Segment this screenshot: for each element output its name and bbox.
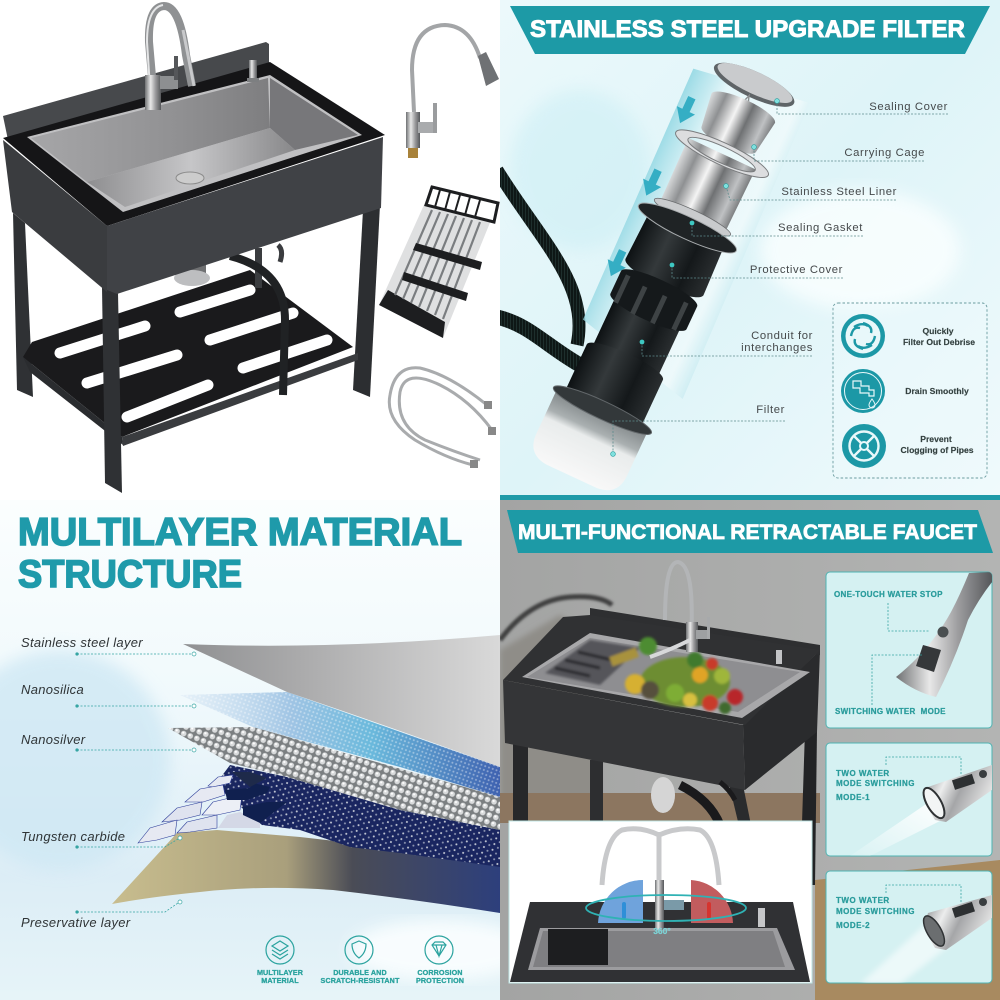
filter title banner: STAINLESS STEEL UPGRADE FILTER bbox=[530, 16, 965, 43]
label: nanosilver bbox=[21, 732, 196, 752]
sink basin bbox=[27, 75, 362, 212]
hot water sector bbox=[691, 880, 733, 923]
text: corrosion protection: PROTECTION bbox=[416, 976, 464, 985]
spray head 2 bbox=[919, 765, 992, 822]
text: drain smoothly: Drain Smoothly bbox=[905, 386, 969, 396]
accessory: drain basket bbox=[379, 187, 498, 338]
icon: layers bbox=[266, 936, 294, 964]
text: mode 2: TWO WATER bbox=[836, 896, 890, 905]
text: one-touch water stop: ONE-TOUCH WATER STOP bbox=[834, 590, 943, 599]
label: protective cover: Protective Cover bbox=[750, 264, 843, 276]
layer: stainless steel bbox=[183, 635, 500, 767]
panel: sink product photo bbox=[0, 0, 500, 500]
label: conduit for interchanges bbox=[640, 330, 813, 356]
multilayer title bbox=[18, 517, 462, 588]
layer: nanosilver bbox=[168, 727, 500, 830]
text: mode 1 bbox=[836, 769, 915, 802]
label: stainless steel liner bbox=[724, 184, 897, 200]
layer: nanosilica bbox=[180, 692, 500, 797]
lower collar bbox=[567, 342, 664, 422]
label: nanosilver: Nanosilver bbox=[21, 732, 86, 747]
feature card: mode 2 bbox=[826, 871, 992, 984]
label: carrying cage: Carrying Cage bbox=[844, 147, 925, 159]
label: conduit for interchanges: interchanges bbox=[741, 342, 813, 354]
text: multilayer material bbox=[257, 968, 304, 985]
inset colander bbox=[548, 929, 608, 965]
inset: 360 degree faucet bbox=[509, 821, 812, 983]
label: sealing gasket: Sealing Gasket bbox=[778, 222, 863, 234]
feature card: one-touch stop and switching bbox=[826, 572, 992, 728]
label: filter bbox=[611, 404, 785, 456]
protective cover bbox=[625, 217, 722, 298]
panel: multilayer material structure bbox=[0, 500, 530, 1000]
glass tube bbox=[583, 68, 803, 398]
filter cup bbox=[534, 392, 646, 490]
sealing cover bbox=[714, 62, 794, 107]
faucet title banner: MULTI-FUNCTIONAL RETRACTABLE FAUCET bbox=[518, 521, 977, 544]
collar bbox=[610, 269, 698, 331]
label: tungsten carbide bbox=[21, 829, 182, 849]
label: protective cover bbox=[670, 263, 843, 278]
benefits box bbox=[833, 303, 987, 478]
multilayer title: MULTILAYER MATERIAL bbox=[18, 511, 462, 554]
multilayer title: STRUCTURE bbox=[18, 553, 242, 596]
glass tube and filter parts on tilted axis bbox=[534, 62, 803, 490]
layer stack bbox=[112, 635, 500, 913]
sink stand legs and shelf bbox=[13, 205, 380, 493]
layer: tungsten carbide bbox=[138, 765, 500, 867]
text: quickly filter out debrise: Filter Out Debrise bbox=[903, 337, 975, 347]
text: durable and scratch-resistant bbox=[321, 968, 400, 985]
text: durable and scratch-resistant: SCRATCH-RESISTANT bbox=[321, 976, 400, 985]
sink photo with produce bbox=[503, 562, 820, 885]
label: stainless steel liner: Stainless Steel Liner bbox=[781, 186, 897, 198]
soap dispenser bbox=[247, 60, 259, 82]
filter flange bbox=[552, 385, 652, 435]
sink colander with produce bbox=[545, 640, 640, 685]
text: corrosion protection: CORROSION bbox=[417, 968, 463, 977]
feature card: mode 1 bbox=[826, 743, 992, 856]
spray head 1 bbox=[896, 572, 992, 697]
faucet bbox=[650, 562, 710, 657]
text: prevent clogging of pipes: Clogging of Pipes bbox=[900, 445, 974, 455]
water stream bbox=[850, 800, 946, 856]
text: mode 1: MODE-1 bbox=[836, 793, 870, 802]
accessory: pull-out faucet bbox=[406, 25, 499, 158]
label: nanosilica bbox=[21, 682, 196, 708]
label: nanosilica: Nanosilica bbox=[21, 682, 84, 697]
layer labels bbox=[21, 635, 196, 930]
panel: stainless steel upgrade filter bbox=[497, 0, 1000, 505]
drain and hose bbox=[174, 245, 285, 395]
drain under sink bbox=[651, 777, 735, 825]
conduit bbox=[594, 300, 680, 374]
filter title banner bbox=[510, 6, 990, 54]
label: filter: Filter bbox=[756, 404, 785, 416]
icon: shield bbox=[345, 936, 373, 964]
flow arrows bbox=[608, 96, 696, 276]
label: stainless steel layer: Stainless steel layer bbox=[21, 635, 143, 650]
sealing gasket bbox=[638, 202, 737, 254]
cold water sector bbox=[598, 880, 643, 923]
material feature icons bbox=[257, 936, 464, 985]
text: switching water mode: SWITCHING WATER MODE bbox=[835, 707, 946, 716]
drain hoses bbox=[497, 170, 580, 365]
text: quickly filter out debrise bbox=[904, 328, 975, 346]
rotation ring bbox=[586, 895, 746, 921]
panel: multi-functional retractable faucet bbox=[500, 500, 1000, 1000]
text: prevent clogging of pipes: Prevent bbox=[920, 434, 952, 444]
sink body bbox=[3, 42, 385, 294]
room background bbox=[500, 597, 1000, 1000]
produce pile bbox=[625, 637, 743, 714]
text: quickly filter out debrise: Quickly bbox=[922, 326, 954, 336]
text: prevent clogging of pipes bbox=[900, 434, 974, 455]
text: mode 1: MODE SWITCHING bbox=[836, 779, 915, 788]
filter part labels bbox=[611, 99, 948, 456]
label: tungsten carbide: Tungsten carbide bbox=[21, 829, 125, 844]
360 label: 360° bbox=[653, 926, 671, 936]
spray head 3 bbox=[919, 895, 992, 950]
label: sealing gasket bbox=[690, 221, 863, 236]
faucet on sink bbox=[145, 5, 194, 110]
text: mode 2: MODE SWITCHING bbox=[836, 907, 915, 916]
inset faucets bbox=[602, 829, 719, 900]
label: preservative layer: Preservative layer bbox=[21, 915, 131, 930]
icon: filter fan bbox=[841, 314, 885, 358]
text: mode 1: TWO WATER bbox=[836, 769, 890, 778]
accessory: water hoses bbox=[389, 368, 496, 468]
label: sealing cover: Sealing Cover bbox=[869, 101, 948, 113]
text: corrosion protection bbox=[416, 968, 464, 985]
layer: preservative bbox=[112, 830, 500, 913]
text: multilayer material: MULTILAYER bbox=[257, 968, 304, 977]
text: multilayer material: MATERIAL bbox=[261, 976, 299, 985]
label: stainless steel layer bbox=[21, 635, 196, 656]
label: carrying cage bbox=[752, 145, 925, 161]
label: sealing cover bbox=[775, 99, 948, 114]
faucet title banner bbox=[507, 510, 993, 553]
stainless steel liner bbox=[654, 129, 769, 236]
carrying cage bbox=[701, 92, 776, 154]
label: conduit for interchanges: Conduit for bbox=[751, 330, 813, 342]
text: mode 2: MODE-2 bbox=[836, 921, 870, 930]
spray mist bbox=[860, 920, 950, 984]
text: durable and scratch-resistant: DURABLE AND bbox=[333, 968, 387, 977]
text: mode 2 bbox=[836, 896, 915, 930]
icon: pipe wheel bbox=[842, 424, 886, 468]
label: preservative layer bbox=[21, 900, 182, 930]
icon: diamond bbox=[425, 936, 453, 964]
icon: drain pipe bbox=[841, 369, 885, 413]
